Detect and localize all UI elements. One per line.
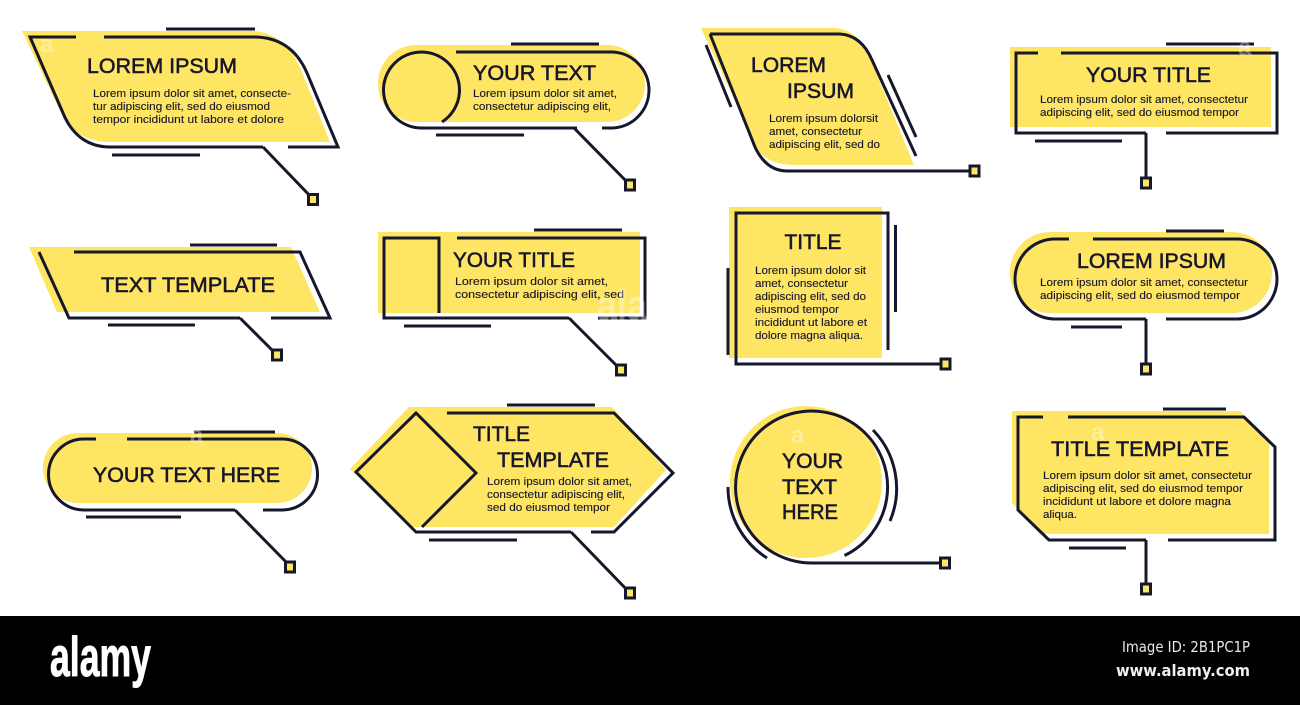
outline frame: [1018, 409, 1275, 548]
title: TEXT TEMPLATE: [101, 274, 275, 297]
title: TITLE TEMPLATE: [1051, 438, 1229, 461]
yellow shape: [701, 28, 914, 165]
outline frame: [48, 432, 317, 517]
image id: Image ID: 2B1PC1P: [1122, 638, 1250, 656]
end marker: [940, 558, 950, 568]
body text: Lorem ipsum dolor sit: [755, 265, 866, 277]
yellow shape: [1010, 232, 1272, 313]
body text: dolore magna aliqua.: [755, 330, 863, 342]
outline frame: [728, 213, 943, 364]
body text: incididunt ut labore et dolore magna: [1043, 496, 1232, 508]
watermark letters: a: [1091, 419, 1105, 446]
body text: Lorem ipsum dolor sit amet,: [455, 276, 608, 288]
body text: Lorem ipsum dolor sit amet,: [487, 476, 632, 488]
yellow shape: [43, 433, 312, 503]
watermark patch: ala: [597, 281, 647, 330]
body text: adipiscing elit, sed do eiusmod tempor: [1040, 290, 1240, 302]
title: IPSUM: [787, 80, 854, 103]
yellow shape: [1010, 47, 1271, 127]
body text: [473, 88, 617, 113]
yellow shape: [350, 407, 666, 527]
connector with end marker: [574, 128, 634, 190]
body text: consectetur adipiscing elit, sed: [455, 289, 624, 301]
body text: [1043, 470, 1252, 521]
body text: Lorem ipsum dolor sit amet, consectetur: [1043, 470, 1252, 482]
title: [473, 423, 609, 472]
callout: your text here pill: [43, 432, 318, 572]
body text: [487, 476, 632, 514]
body text: [755, 265, 867, 342]
body text: tur adipiscing elit, sed do eiusmod: [93, 101, 270, 113]
body text: [455, 276, 624, 301]
body text: Lorem ipsum dolor sit amet, consectetur: [1040, 94, 1248, 106]
body text: sed do eiusmod tempor: [487, 502, 610, 514]
body text: [769, 113, 880, 151]
body text: tempor incididunt ut labore et dolore: [93, 114, 284, 126]
callout: lorem ipsum slanted: [22, 29, 338, 204]
callout: lorem ipsum leaning panel: [701, 28, 979, 176]
website: www.alamy.com: [1116, 661, 1250, 680]
footer bar: [0, 616, 1300, 705]
title: YOUR TEXT HERE: [93, 464, 280, 487]
body text: amet, consectetur: [769, 126, 862, 138]
yellow shape: [29, 247, 320, 312]
watermark letters: a: [791, 422, 805, 449]
outline frame: [706, 34, 974, 171]
title: TITLE: [473, 423, 530, 446]
outline frame: [356, 405, 673, 540]
callout: title template hexagon: [350, 405, 673, 598]
yellow shape: [378, 232, 640, 313]
body text: Lorem ipsum dolor sit amet, consectetur: [1040, 277, 1248, 289]
connector with end marker: [571, 532, 634, 598]
end marker: [970, 166, 979, 176]
connector with end marker: [569, 318, 626, 375]
yellow shape: [1012, 411, 1269, 534]
yellow shape: [22, 31, 330, 142]
yellow shape: [729, 207, 882, 358]
connector with end marker: [263, 147, 318, 204]
title: TEXT: [782, 476, 837, 499]
body text: [1040, 94, 1248, 119]
title: TEMPLATE: [497, 449, 609, 472]
callout: title template cut corners: [1012, 409, 1275, 594]
body text: Lorem ipsum dolor sit amet,: [473, 88, 617, 100]
connector with end marker: [1142, 133, 1150, 188]
body text: aliqua.: [1043, 509, 1077, 521]
body text: [93, 88, 291, 126]
body text: adipiscing elit, sed do eiusmod tempor: [1040, 107, 1239, 119]
outline frame: [384, 230, 645, 326]
body text: incididunt ut labore et: [755, 317, 867, 329]
connector with end marker: [1142, 319, 1150, 374]
outline frame: [1016, 44, 1277, 141]
title: YOUR TEXT: [473, 62, 596, 85]
connector with end marker: [1142, 540, 1150, 594]
outline frame: [1015, 231, 1277, 327]
title: YOUR: [782, 450, 843, 473]
body text: eiusmod tempor: [755, 304, 839, 316]
watermark letters: [40, 31, 1252, 449]
title: LOREM IPSUM: [87, 55, 237, 78]
body text: Lorem ipsum dolorsit: [769, 113, 878, 125]
connector with end marker: [235, 510, 294, 572]
end marker: [941, 359, 950, 369]
body text: consectetur adipiscing elit,: [473, 101, 611, 113]
callout: your text here circle: [728, 406, 950, 568]
watermark letters: a: [1238, 34, 1252, 61]
outline frame: [384, 44, 649, 135]
callout: your title rectangle: [1010, 44, 1277, 188]
body text: adipiscing elit, sed do: [769, 139, 880, 151]
body text: adipiscing elit, sed do: [755, 291, 866, 303]
callout: title square: [728, 207, 950, 369]
title: YOUR TITLE: [1086, 64, 1211, 87]
yellow circle: [730, 406, 882, 558]
body text: Lorem ipsum dolor sit amet, consecte-: [93, 88, 291, 100]
watermark letters: a: [190, 422, 204, 449]
callout: your title with square: [378, 230, 647, 375]
title: [751, 54, 854, 103]
callout: lorem ipsum pill: [1010, 231, 1277, 374]
body text: [1040, 277, 1248, 302]
title: LOREM: [751, 54, 826, 77]
body text: amet, consectetur: [755, 278, 848, 290]
body text: adipiscing elit, sed do eiusmod tempor: [1043, 483, 1243, 495]
title: YOUR TITLE: [453, 249, 575, 272]
outline frame: [39, 245, 330, 325]
callout: your text circle pill: [378, 44, 649, 190]
watermark letters: a: [40, 31, 54, 58]
yellow shape: [378, 45, 645, 122]
outline frame: [728, 411, 945, 563]
logo: alamy: alamy: [50, 625, 151, 688]
title: TITLE: [784, 231, 842, 254]
outline frame: [30, 29, 338, 155]
callout: text template slanted: [29, 245, 330, 360]
title: LOREM IPSUM: [1077, 250, 1226, 273]
title: [782, 450, 843, 524]
body text: consectetur adipiscing elit,: [487, 489, 625, 501]
title: HERE: [782, 501, 838, 524]
connector with end marker: [240, 318, 282, 360]
